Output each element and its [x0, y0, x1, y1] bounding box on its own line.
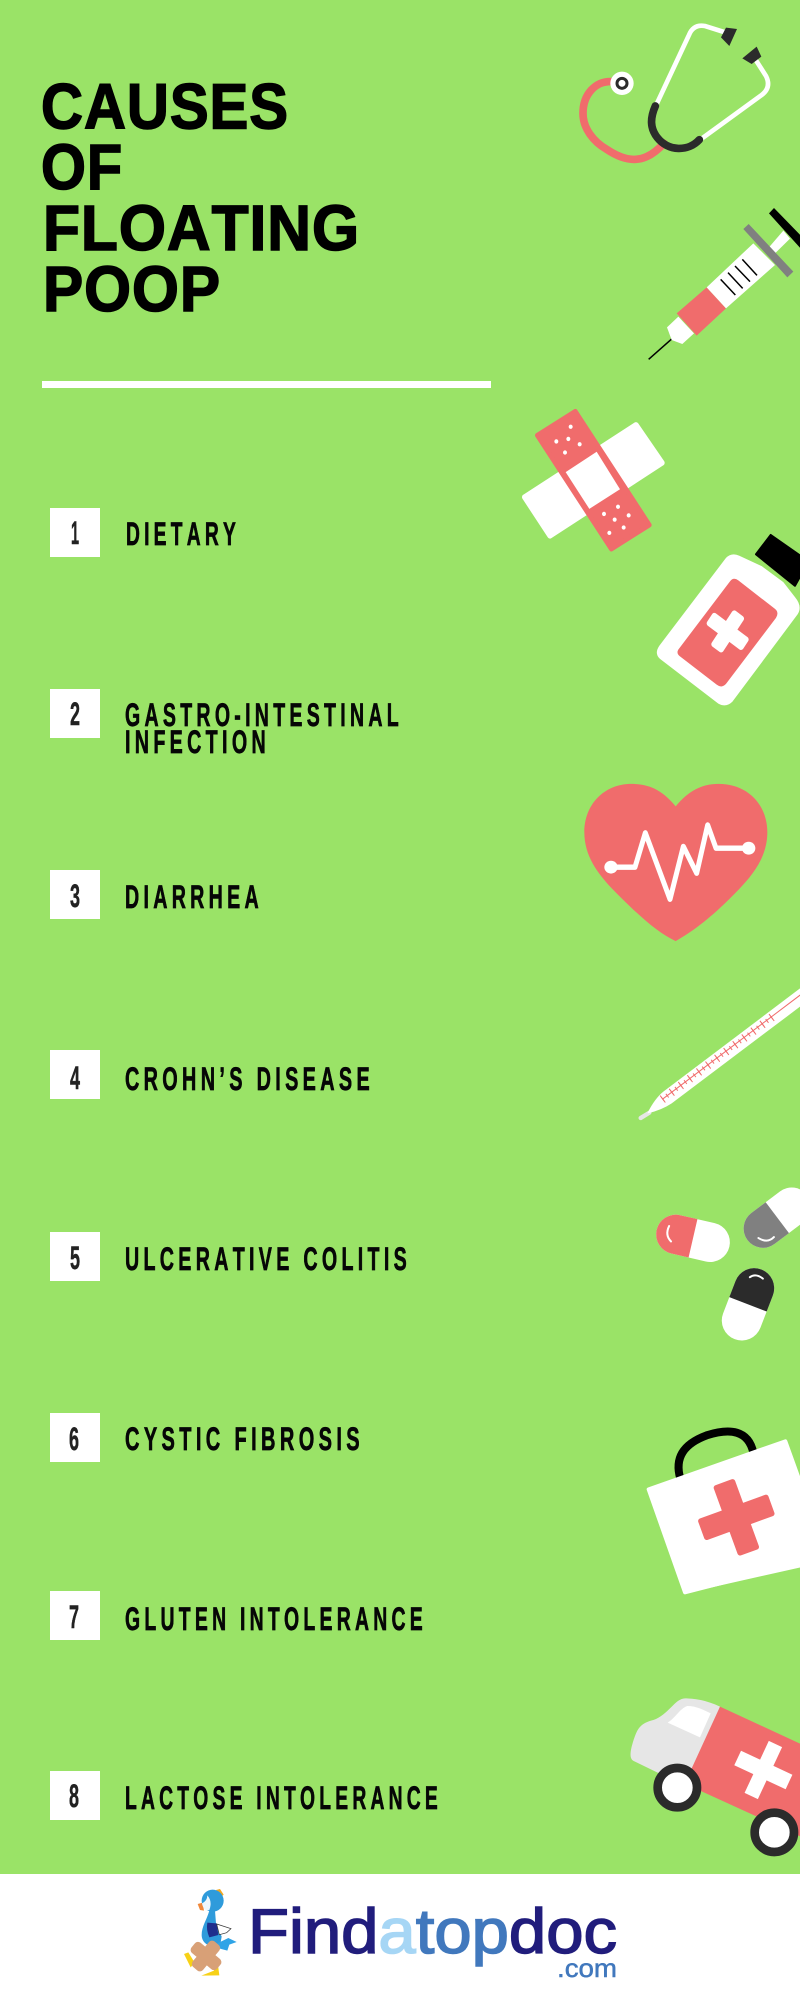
list item 5: ulcerative colitis — [50, 1232, 411, 1281]
title: CAUSES — [41, 70, 289, 142]
list item 8: lactose intolerance: 8 — [69, 1778, 79, 1814]
list item 7: gluten intolerance — [50, 1591, 427, 1640]
title: OF — [41, 131, 123, 203]
title: FLOATING — [43, 192, 360, 264]
icon: first aid kit — [649, 1432, 800, 1593]
title underline rule — [42, 381, 491, 388]
icon: crossed bandage — [525, 411, 662, 549]
list item 7: gluten intolerance: 7 — [69, 1599, 79, 1635]
icon: pills — [652, 1180, 800, 1346]
footer logo: Findatopdoc.com: .com — [557, 1953, 617, 1983]
icon: ambulance — [631, 1698, 800, 1852]
list item 2: gastro-intestinal infection: INFECTION — [125, 724, 270, 760]
list item 5: ulcerative colitis: 5 — [70, 1240, 80, 1276]
list item 2: gastro-intestinal infection: 2 — [70, 696, 80, 732]
logo mascot: duck with bandage — [183, 1889, 237, 1979]
list item 8: lactose intolerance — [50, 1771, 442, 1820]
list item 8: lactose intolerance: LACTOSE INTOLERANCE — [125, 1780, 442, 1816]
icon: thermometer — [641, 983, 800, 1118]
list item 7: gluten intolerance: GLUTEN INTOLERANCE — [125, 1601, 427, 1637]
list item 6: cystic fibrosis: CYSTIC FIBROSIS — [125, 1421, 364, 1457]
list item 2: gastro-intestinal infection: GASTRO-INTESTINAL — [125, 697, 403, 733]
list item 6: cystic fibrosis: 6 — [69, 1421, 79, 1457]
red pill — [652, 1211, 734, 1266]
footer logo: Findatopdoc.com — [183, 1889, 617, 1983]
list item 3: diarrhea: DIARRHEA — [125, 879, 263, 915]
icon: heart with pulse — [584, 784, 767, 941]
icon: medicine bottle — [657, 535, 800, 705]
icon: syringe — [649, 208, 800, 359]
list item 4: crohn's disease: 4 — [70, 1060, 80, 1096]
list item 5: ulcerative colitis: ULCERATIVE COLITIS — [125, 1241, 411, 1277]
list item 3: diarrhea: 3 — [70, 878, 80, 914]
icon: stethoscope — [583, 26, 768, 159]
list item 2: gastro-intestinal infection — [50, 689, 403, 760]
list item 6: cystic fibrosis — [50, 1413, 364, 1462]
list item 4: crohn's disease: CROHN’S DISEASE — [125, 1061, 374, 1097]
list item 3: diarrhea — [50, 870, 263, 919]
list item 1: dietary: DIETARY — [126, 516, 240, 552]
black pill — [716, 1262, 780, 1346]
gray pill — [736, 1180, 800, 1256]
title — [41, 70, 360, 325]
list item 1: dietary: 1 — [71, 515, 79, 551]
list item 1: dietary — [50, 508, 240, 557]
title: POOP — [43, 253, 221, 325]
footer logo: Findatopdoc.com: Findatopdoc — [248, 1897, 617, 1967]
list item 4: crohn's disease — [50, 1050, 374, 1099]
